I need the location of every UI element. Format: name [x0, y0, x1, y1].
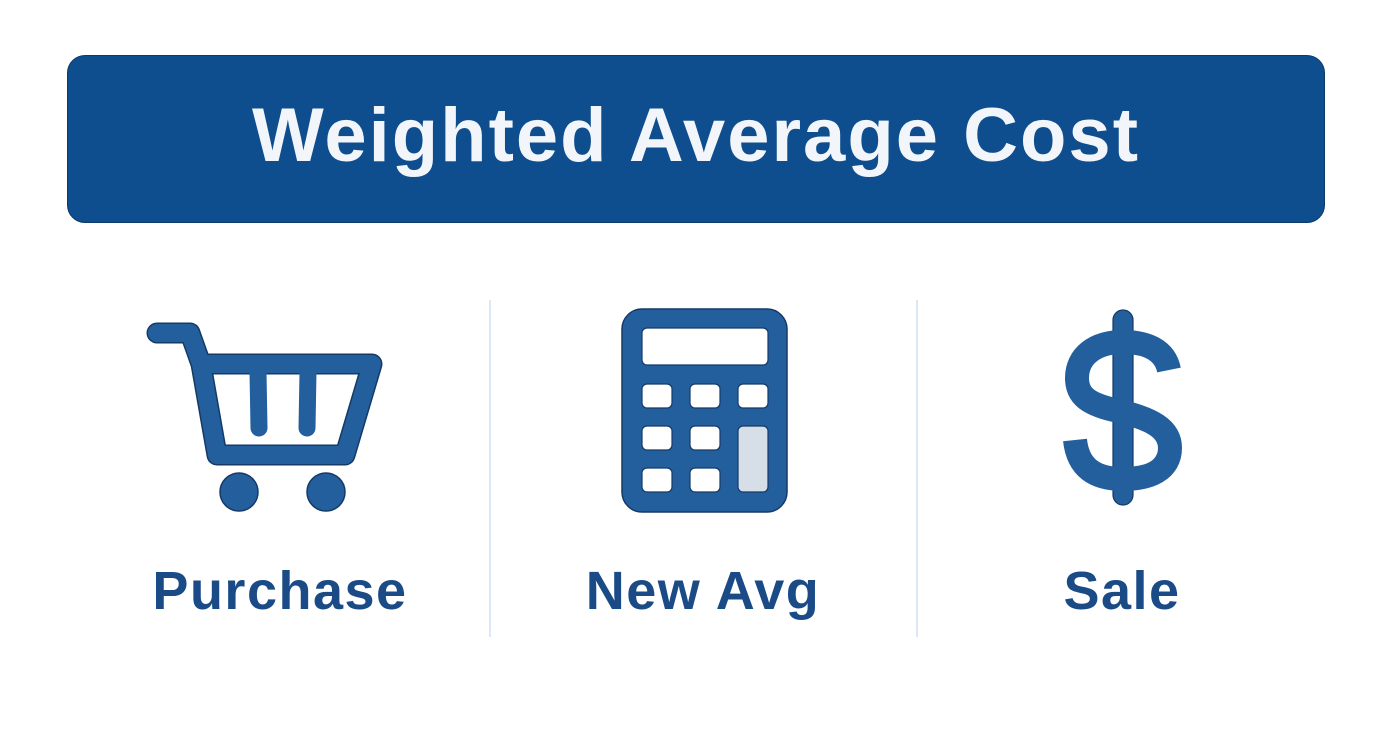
icon: dollar sign — [1075, 310, 1170, 505]
icon: shopping cart — [157, 333, 372, 511]
label: Purchase: Purchase — [152, 561, 408, 621]
label: Sale: Sale — [1063, 561, 1181, 621]
title: Weighted Average Cost — [252, 93, 1140, 178]
title banner — [67, 55, 1325, 223]
label: New Avg: New Avg — [586, 561, 820, 621]
icon: calculator — [622, 309, 787, 512]
